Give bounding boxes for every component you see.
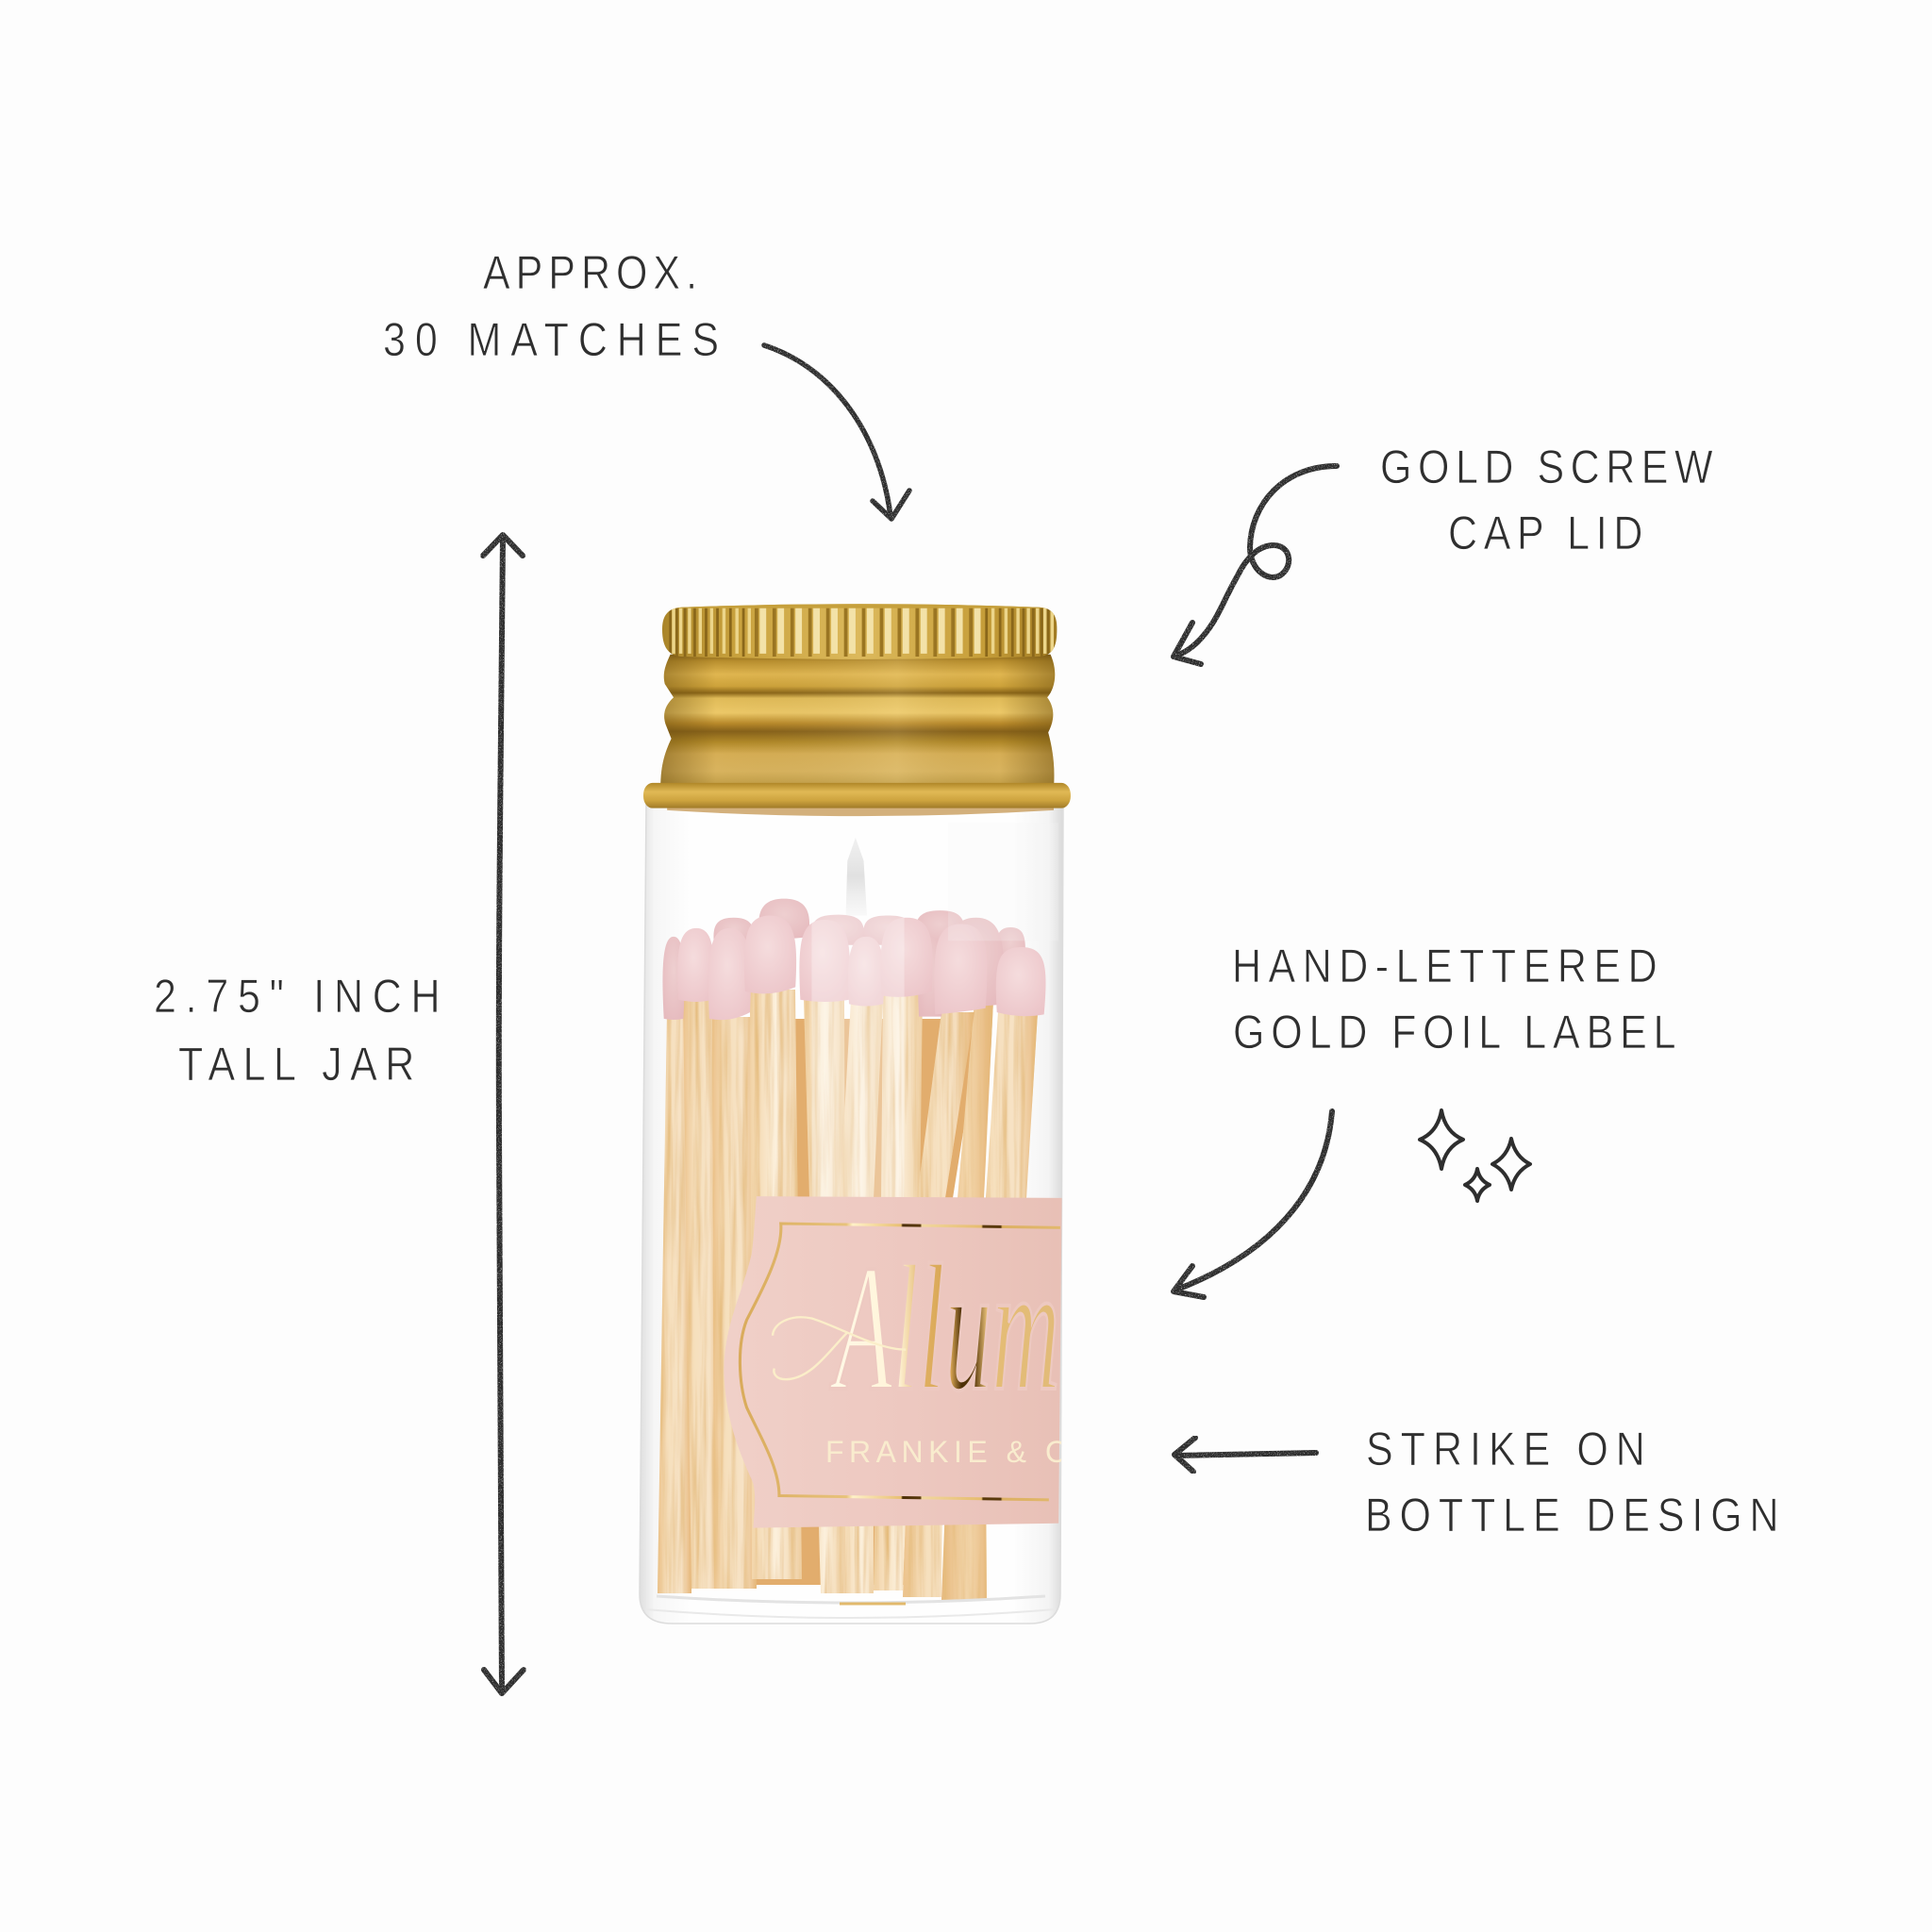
text: bottle design: BOTTLE DESIGN [1365, 1489, 1779, 1541]
dark gaps behind matches [681, 1019, 981, 1585]
glass reflection [811, 823, 1058, 1198]
cap flange [643, 783, 1071, 808]
knurled rim [662, 604, 1057, 659]
gold cap [643, 600, 1071, 816]
match heads [662, 899, 1046, 1020]
script brand lettering: Allume [829, 1229, 1102, 1429]
annotation: hand-lettered gold foil label [1174, 940, 1676, 1297]
text: 2.75 inch: 2.75" INCH [154, 970, 441, 1023]
gold foil border [740, 1224, 1060, 1500]
label brand name: FRANKIE & CL [825, 1435, 1094, 1469]
icon: sparkles [1420, 1110, 1530, 1201]
text: tall jar: TALL JAR [178, 1038, 414, 1091]
text: strike on: STRIKE ON [1366, 1423, 1645, 1475]
text: hand-lettered: HAND-LETTERED [1232, 940, 1657, 992]
text: 30 matches: 30 MATCHES [383, 313, 719, 366]
infographic canvas [157, 256, 1775, 1696]
cap underside reflection [667, 804, 1054, 816]
text: approx.: APPROX. [483, 246, 697, 299]
annotation: jar height [154, 535, 524, 1693]
annotation: approx. 30 matches [383, 246, 909, 519]
arrow: curved to label [1174, 1111, 1332, 1297]
product photo: glass jar of matches [640, 600, 1102, 1624]
script flourish [773, 1317, 906, 1379]
text: gold foil label: GOLD FOIL LABEL [1233, 1006, 1676, 1058]
arrow: vertical dimension [483, 535, 524, 1693]
text: cap lid: CAP LID [1448, 507, 1642, 559]
pink label [724, 1196, 1062, 1528]
annotation: gold screw cap lid [1174, 441, 1713, 664]
arrow: down to jar [764, 345, 909, 519]
label paper [724, 1196, 1062, 1528]
arrow: left to jar [1174, 1438, 1316, 1472]
match sticks [658, 990, 1038, 1600]
arrow: looped to cap [1174, 466, 1337, 664]
threaded section [660, 655, 1055, 787]
annotation: strike on bottle design [1174, 1423, 1779, 1541]
text: gold screw: GOLD SCREW [1380, 441, 1713, 493]
jar base detail [645, 1596, 1055, 1618]
glass jar body [640, 802, 1063, 1624]
